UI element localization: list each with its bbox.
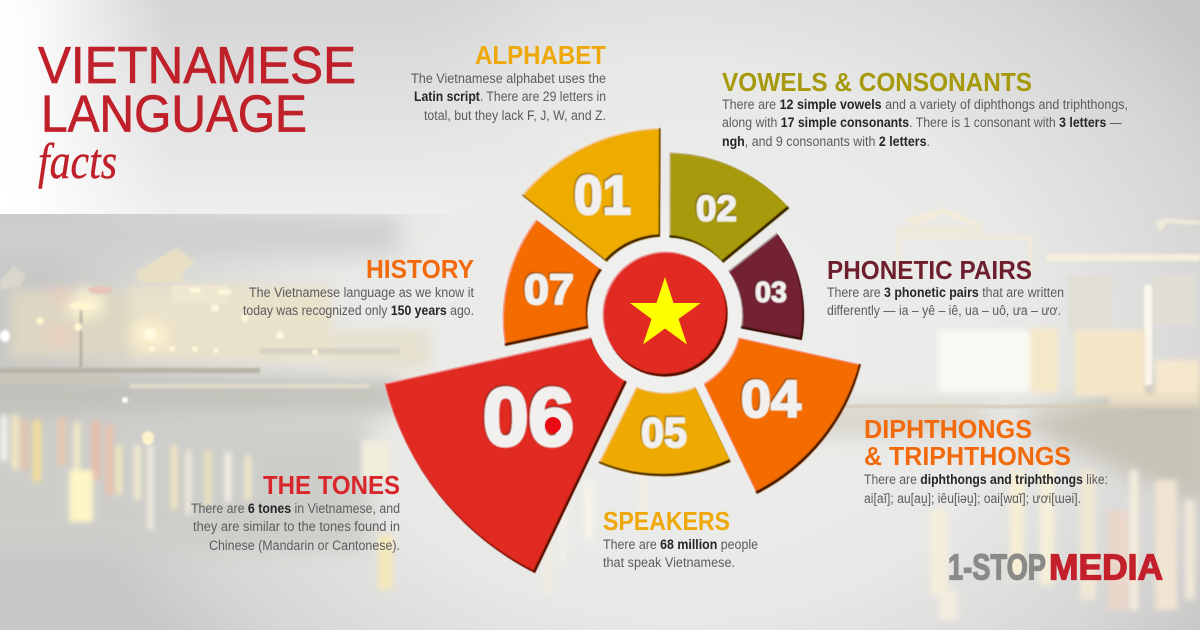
title: LANGUAGE bbox=[41, 86, 307, 144]
text block: speakers: SPEAKERS bbox=[603, 506, 730, 536]
text block: alphabet: ALPHABET bbox=[475, 40, 606, 70]
dark water and shore tones bbox=[0, 215, 1200, 550]
text block: alphabet: total, but they lack F, J, W, and Z. bbox=[424, 108, 606, 123]
segment 07 bbox=[503, 219, 602, 346]
segment 04 bbox=[703, 337, 861, 494]
segment 07: 07 bbox=[524, 266, 574, 314]
segment 03 bbox=[728, 233, 804, 340]
title panel: white gradient box bbox=[0, 0, 424, 214]
text block: speakers: that speak Vietnamese. bbox=[603, 555, 735, 570]
centre and right reflections bbox=[545, 465, 1195, 620]
text block: diphthongs and triphthongs bbox=[864, 414, 1108, 506]
logo: 1-STOP MEDIA: MEDIA bbox=[1049, 546, 1163, 588]
title: VIETNAMESE bbox=[38, 37, 356, 95]
text block: speakers: There are 68 million people bbox=[603, 537, 758, 552]
text block: diphthongs and triphthongs: DIPHTHONGS bbox=[864, 414, 1032, 444]
text block: vowels and consonants: ngh, and 9 consonants with 2 letters. bbox=[722, 134, 930, 149]
left reflections bbox=[1, 415, 393, 590]
logo: 1-STOP MEDIA: 1-STOP bbox=[948, 546, 1046, 588]
wheel halo bbox=[545, 194, 785, 434]
text block: alphabet: The Vietnamese alphabet uses the bbox=[411, 71, 606, 86]
title: facts bbox=[38, 133, 117, 189]
red dot in the 6 bbox=[545, 417, 561, 433]
text block: history: today was recognized only 150 years ago. bbox=[243, 303, 474, 318]
segment 01: 01 bbox=[574, 164, 631, 226]
text block: vowels and consonants: along with 17 simple consonants. There is 1 consonant with 3 letters — bbox=[722, 115, 1122, 130]
text block: phonetic pairs: PHONETIC PAIRS bbox=[827, 255, 1032, 285]
logo: 1-STOP MEDIA bbox=[948, 546, 1163, 588]
segment 05: 05 bbox=[641, 409, 687, 456]
segment 02 bbox=[669, 152, 789, 263]
text block: the tones: There are 6 tones in Vietnamese, and bbox=[191, 501, 400, 516]
text block: the tones bbox=[191, 470, 400, 553]
text block: the tones: THE TONES bbox=[263, 470, 400, 500]
text block: alphabet bbox=[411, 40, 606, 123]
text block: history: The Vietnamese language as we know it bbox=[249, 285, 474, 300]
title bbox=[38, 37, 356, 189]
text block: diphthongs and triphthongs: ai[aĭ]; au[aṷ]; iêu[iəṷ]; oai[wɑĭ]; ươi[ɯəi]. bbox=[864, 491, 1081, 506]
text block: phonetic pairs bbox=[827, 255, 1064, 318]
text block: vowels and consonants bbox=[722, 67, 1128, 149]
text block: the tones: Chinese (Mandarin or Cantonese). bbox=[209, 538, 400, 553]
text block: alphabet: Latin script. There are 29 letters in bbox=[414, 89, 606, 104]
segment 03: 03 bbox=[755, 277, 787, 309]
wheel diagram bbox=[384, 128, 861, 573]
segment 04: 04 bbox=[741, 371, 801, 429]
right buildings bbox=[800, 208, 1200, 408]
left buildings glow bbox=[10, 285, 430, 370]
text block: history: HISTORY bbox=[366, 254, 474, 284]
text block: speakers bbox=[603, 506, 758, 570]
text block: history bbox=[243, 254, 474, 318]
text block: vowels and consonants: VOWELS & CONSONANTS bbox=[722, 67, 1032, 97]
text block: phonetic pairs: differently — ia – yê – iê, ua – uô, ưa – ươ. bbox=[827, 303, 1061, 318]
text block: diphthongs and triphthongs: & TRIPHTHONGS bbox=[864, 441, 1071, 471]
text block: vowels and consonants: There are 12 simple vowels and a variety of diphthongs and triphthongs, bbox=[722, 97, 1128, 112]
left buildings details bbox=[0, 248, 400, 445]
segment 05 bbox=[598, 387, 731, 476]
icon: yellow star bbox=[630, 277, 701, 344]
text block: phonetic pairs: There are 3 phonetic pairs that are written bbox=[827, 285, 1064, 300]
segment 01 bbox=[522, 128, 660, 262]
segment 02: 02 bbox=[696, 188, 737, 229]
segment 06 bbox=[384, 337, 627, 573]
segment 06: 06 bbox=[483, 372, 574, 463]
text block: the tones: they are similar to the tones found in bbox=[193, 519, 400, 534]
centre flag disc bbox=[602, 252, 728, 376]
text block: diphthongs and triphthongs: There are diphthongs and triphthongs like: bbox=[864, 472, 1108, 487]
